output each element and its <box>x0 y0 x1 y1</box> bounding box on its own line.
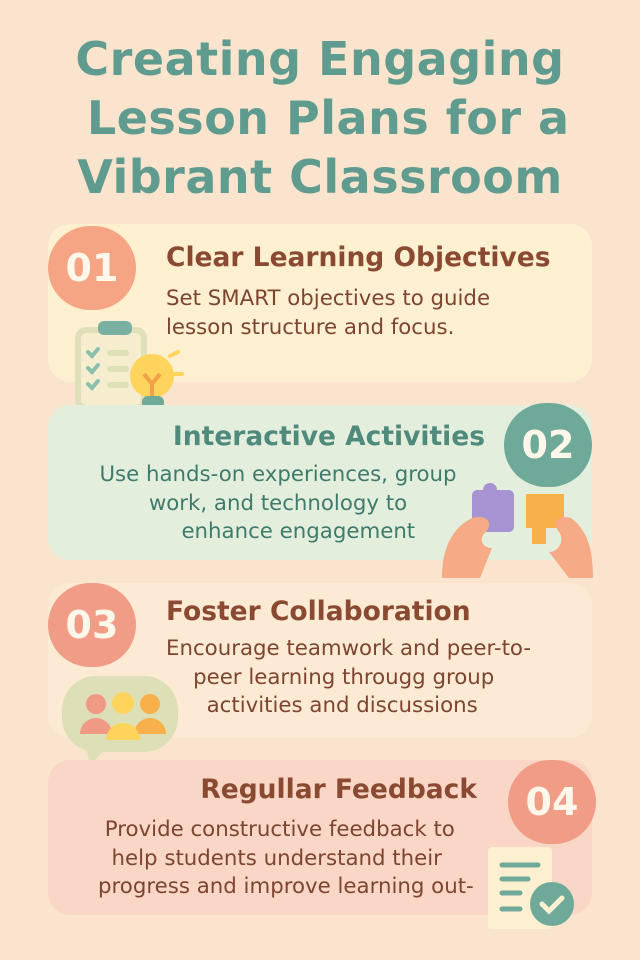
title: Vibrant Classroom <box>77 150 563 204</box>
badge 01 <box>48 226 136 310</box>
text 04: Provide constructive feedback to <box>105 817 455 842</box>
text 04 <box>98 817 474 899</box>
text 03: Encourage teamwork and peer-to- <box>166 636 531 661</box>
badge 04: 04 <box>526 780 578 824</box>
heading 02: Interactive Activities <box>173 421 485 452</box>
text 01: Set SMART objectives to guide <box>166 286 490 311</box>
heading 04: Regullar Feedback <box>200 774 477 805</box>
text 04: help students understand their <box>112 846 442 870</box>
icon: group speech bubble <box>62 676 178 760</box>
title <box>75 32 570 204</box>
badge 03 <box>48 583 136 667</box>
heading 03: Foster Collaboration <box>166 596 471 627</box>
icon: clipboard and bulb <box>75 321 184 405</box>
icon: feedback document with check <box>488 847 574 929</box>
text 04: progress and improve learning out- <box>98 874 474 899</box>
badge 01: 01 <box>66 246 118 290</box>
text 02 <box>99 462 457 544</box>
text 03: activities and discussions <box>207 693 478 718</box>
panel: 01 clear learning objectives <box>48 224 592 382</box>
badge 03: 03 <box>66 603 118 647</box>
badge 02: 02 <box>522 423 574 467</box>
text 02: work, and technology to <box>149 490 407 516</box>
text 01 <box>166 286 490 340</box>
panel: 03 foster collaboration <box>48 583 592 738</box>
icon: puzzle hands <box>442 483 593 578</box>
badge 04 <box>508 760 596 844</box>
badge 02 <box>504 403 592 487</box>
panel: 04 regular feedback <box>48 760 592 915</box>
text 01: lesson structure and focus. <box>166 314 454 340</box>
text 02: Use hands-on experiences, group <box>99 462 457 487</box>
title: Creating Engaging <box>75 32 565 86</box>
text 02: enhance engagement <box>181 519 415 544</box>
heading 01: Clear Learning Objectives <box>166 242 551 273</box>
panel: 02 interactive activities <box>48 405 592 560</box>
text 03 <box>166 636 531 718</box>
title: Lesson Plans for a <box>87 91 570 145</box>
text 03: peer learning througg group <box>193 664 494 690</box>
